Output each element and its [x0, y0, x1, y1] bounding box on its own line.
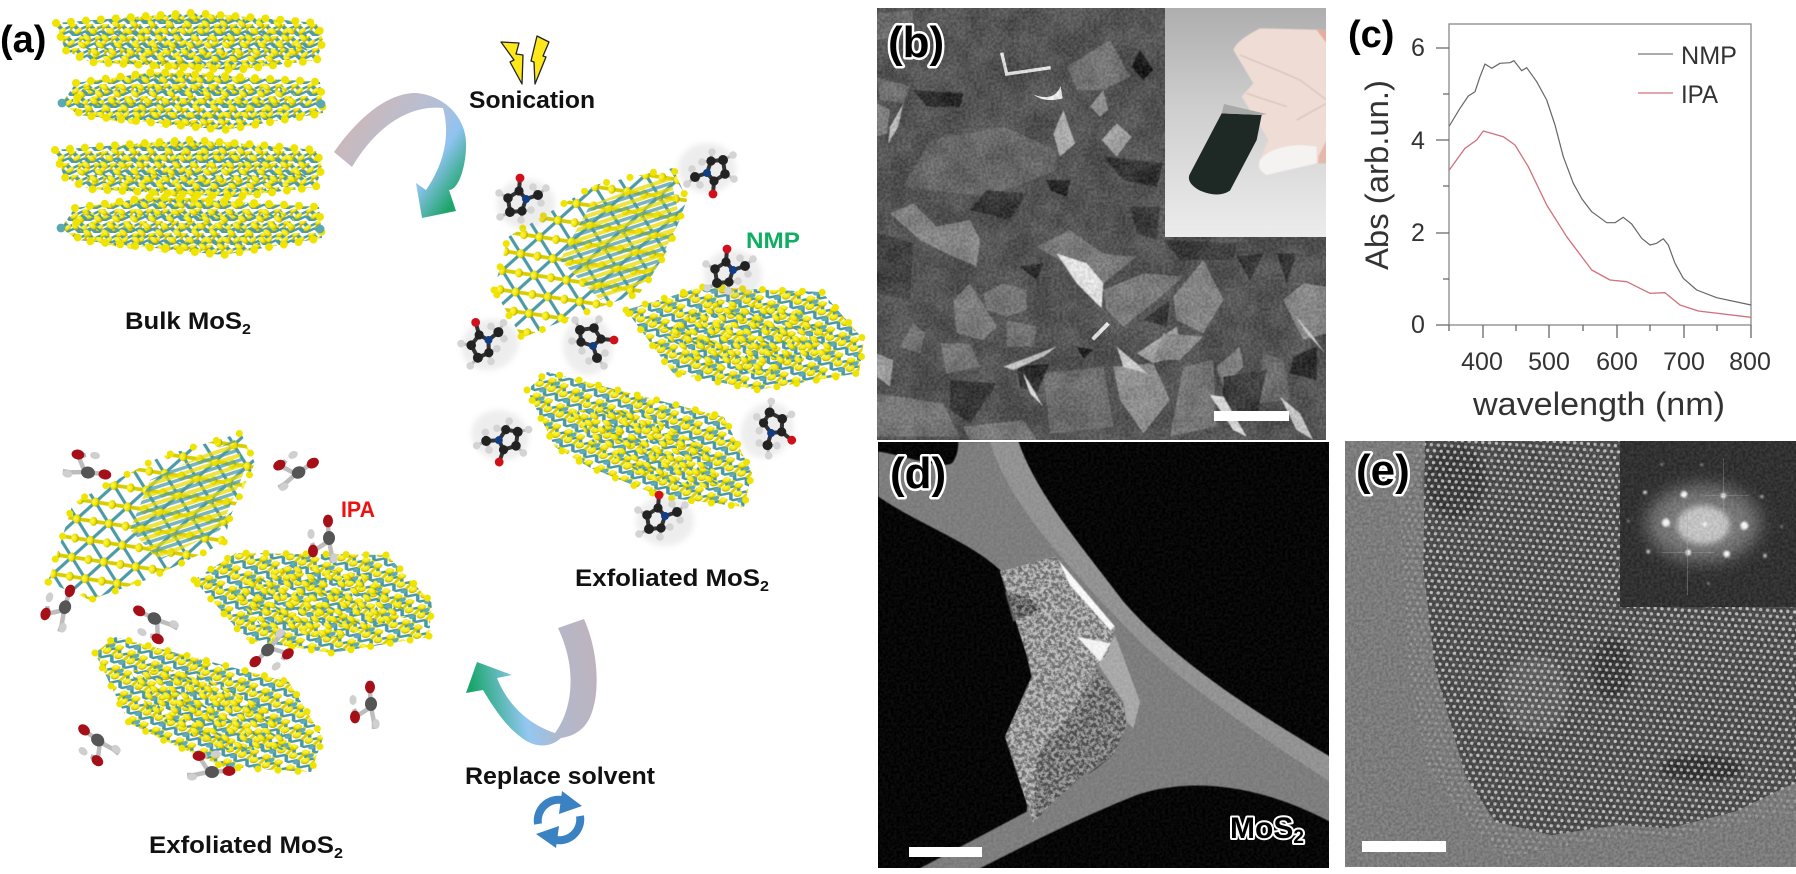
membrane bright rim	[990, 442, 1330, 782]
panel: (e) HRTEM image	[1345, 441, 1796, 867]
x tick labels	[1461, 348, 1771, 376]
legend: NMP	[1681, 42, 1737, 70]
FFT streaks	[1662, 458, 1748, 595]
vial	[1189, 113, 1262, 194]
atomic lattice	[1423, 441, 1796, 835]
y axis title: Abs (arb.un.)	[1359, 80, 1395, 270]
x axis title: wavelength (nm)	[1472, 386, 1725, 422]
label: Exfoliated MoS2 (IPA): Exfoliated MoS	[149, 832, 321, 859]
FFT spots	[1627, 463, 1783, 584]
panel label (c): (c)	[1348, 14, 1394, 56]
panel label (d): (d)	[890, 449, 946, 498]
curve: IPA	[1449, 131, 1751, 317]
flake B	[626, 287, 864, 390]
panel: (c) absorbance chart	[1348, 14, 1771, 422]
crystal dark body	[1423, 441, 1796, 835]
x tick labels: 800	[1729, 348, 1771, 376]
scale bar d	[909, 847, 982, 857]
exfoliated flakes in NMP	[494, 168, 864, 507]
inset: FFT pattern	[1620, 441, 1796, 607]
label: Bulk MoS2: Bulk MoS	[125, 308, 234, 335]
y tick labels: 4	[1411, 127, 1425, 155]
flake E	[194, 553, 432, 653]
IPA molecules	[36, 442, 380, 781]
amorphous edge band	[1400, 441, 1796, 858]
y tick labels	[1411, 34, 1425, 339]
flake highlights	[1058, 560, 1115, 775]
panel: (a) exfoliation schematic	[0, 13, 864, 862]
label: IPA: IPA	[341, 497, 375, 522]
bulk MoS2 layer stack	[55, 13, 325, 255]
x tick labels: 700	[1663, 348, 1705, 376]
SEM flake texture	[877, 10, 1327, 440]
x tick labels: 400	[1461, 348, 1503, 376]
flake rim	[1098, 635, 1140, 728]
curve: NMP	[1449, 61, 1751, 305]
glove	[1233, 28, 1327, 175]
STEM noise	[878, 442, 1329, 868]
label: Exfoliated MoS2 (NMP): Exfoliated MoS	[575, 565, 747, 592]
panel: (d) STEM image	[878, 442, 1330, 870]
flake F	[95, 637, 323, 772]
exfoliated flakes in IPA	[48, 433, 432, 772]
legend	[1638, 42, 1737, 109]
FFT noise	[1620, 441, 1796, 607]
label: Exfoliated MoS2 (IPA): 2	[334, 845, 343, 862]
label: Exfoliated MoS2 (NMP): 2	[760, 578, 769, 595]
flake bright sheet	[1000, 557, 1115, 823]
FFT halo	[1647, 485, 1760, 562]
label: Sonication: Sonication	[469, 87, 595, 114]
darker contrast patches	[1425, 445, 1485, 518]
inset: vial photo	[1165, 8, 1327, 237]
arrow: sonication curved arrow	[334, 93, 466, 218]
flake C	[527, 372, 752, 507]
flake mottling	[1000, 557, 1126, 822]
label: MoS2: 2	[1293, 827, 1304, 848]
icon: refresh arrows	[536, 791, 582, 848]
axes and ticks	[1436, 24, 1751, 338]
flake D	[48, 433, 255, 600]
label: Replace solvent: Replace solvent	[465, 763, 655, 790]
label: Bulk MoS2: 2	[242, 321, 251, 338]
panel: (b) SEM image	[877, 8, 1327, 440]
scale bar b	[1214, 411, 1289, 421]
carbon membrane	[878, 442, 1330, 870]
flake A	[494, 168, 687, 338]
y tick labels: 2	[1411, 219, 1425, 247]
label: NMP: NMP	[746, 228, 800, 253]
y tick labels: 0	[1411, 311, 1425, 339]
scale bar e	[1362, 841, 1446, 852]
icon: lightning bolts	[501, 36, 549, 84]
label: MoS2: MoS	[1230, 812, 1293, 845]
panel label (e): (e)	[1356, 446, 1410, 495]
NMP molecules	[451, 143, 810, 546]
flake dark fold	[1033, 670, 1097, 823]
HRTEM noise	[1345, 441, 1796, 867]
x tick labels: 600	[1596, 348, 1638, 376]
arrow: replace solvent curved arrow	[466, 619, 597, 746]
legend: IPA	[1681, 81, 1718, 109]
panel label (b): (b)	[888, 18, 944, 67]
panel label (a): (a)	[0, 19, 46, 61]
SEM noise	[877, 8, 1326, 440]
y tick labels: 6	[1411, 34, 1425, 62]
x tick labels: 500	[1528, 348, 1570, 376]
